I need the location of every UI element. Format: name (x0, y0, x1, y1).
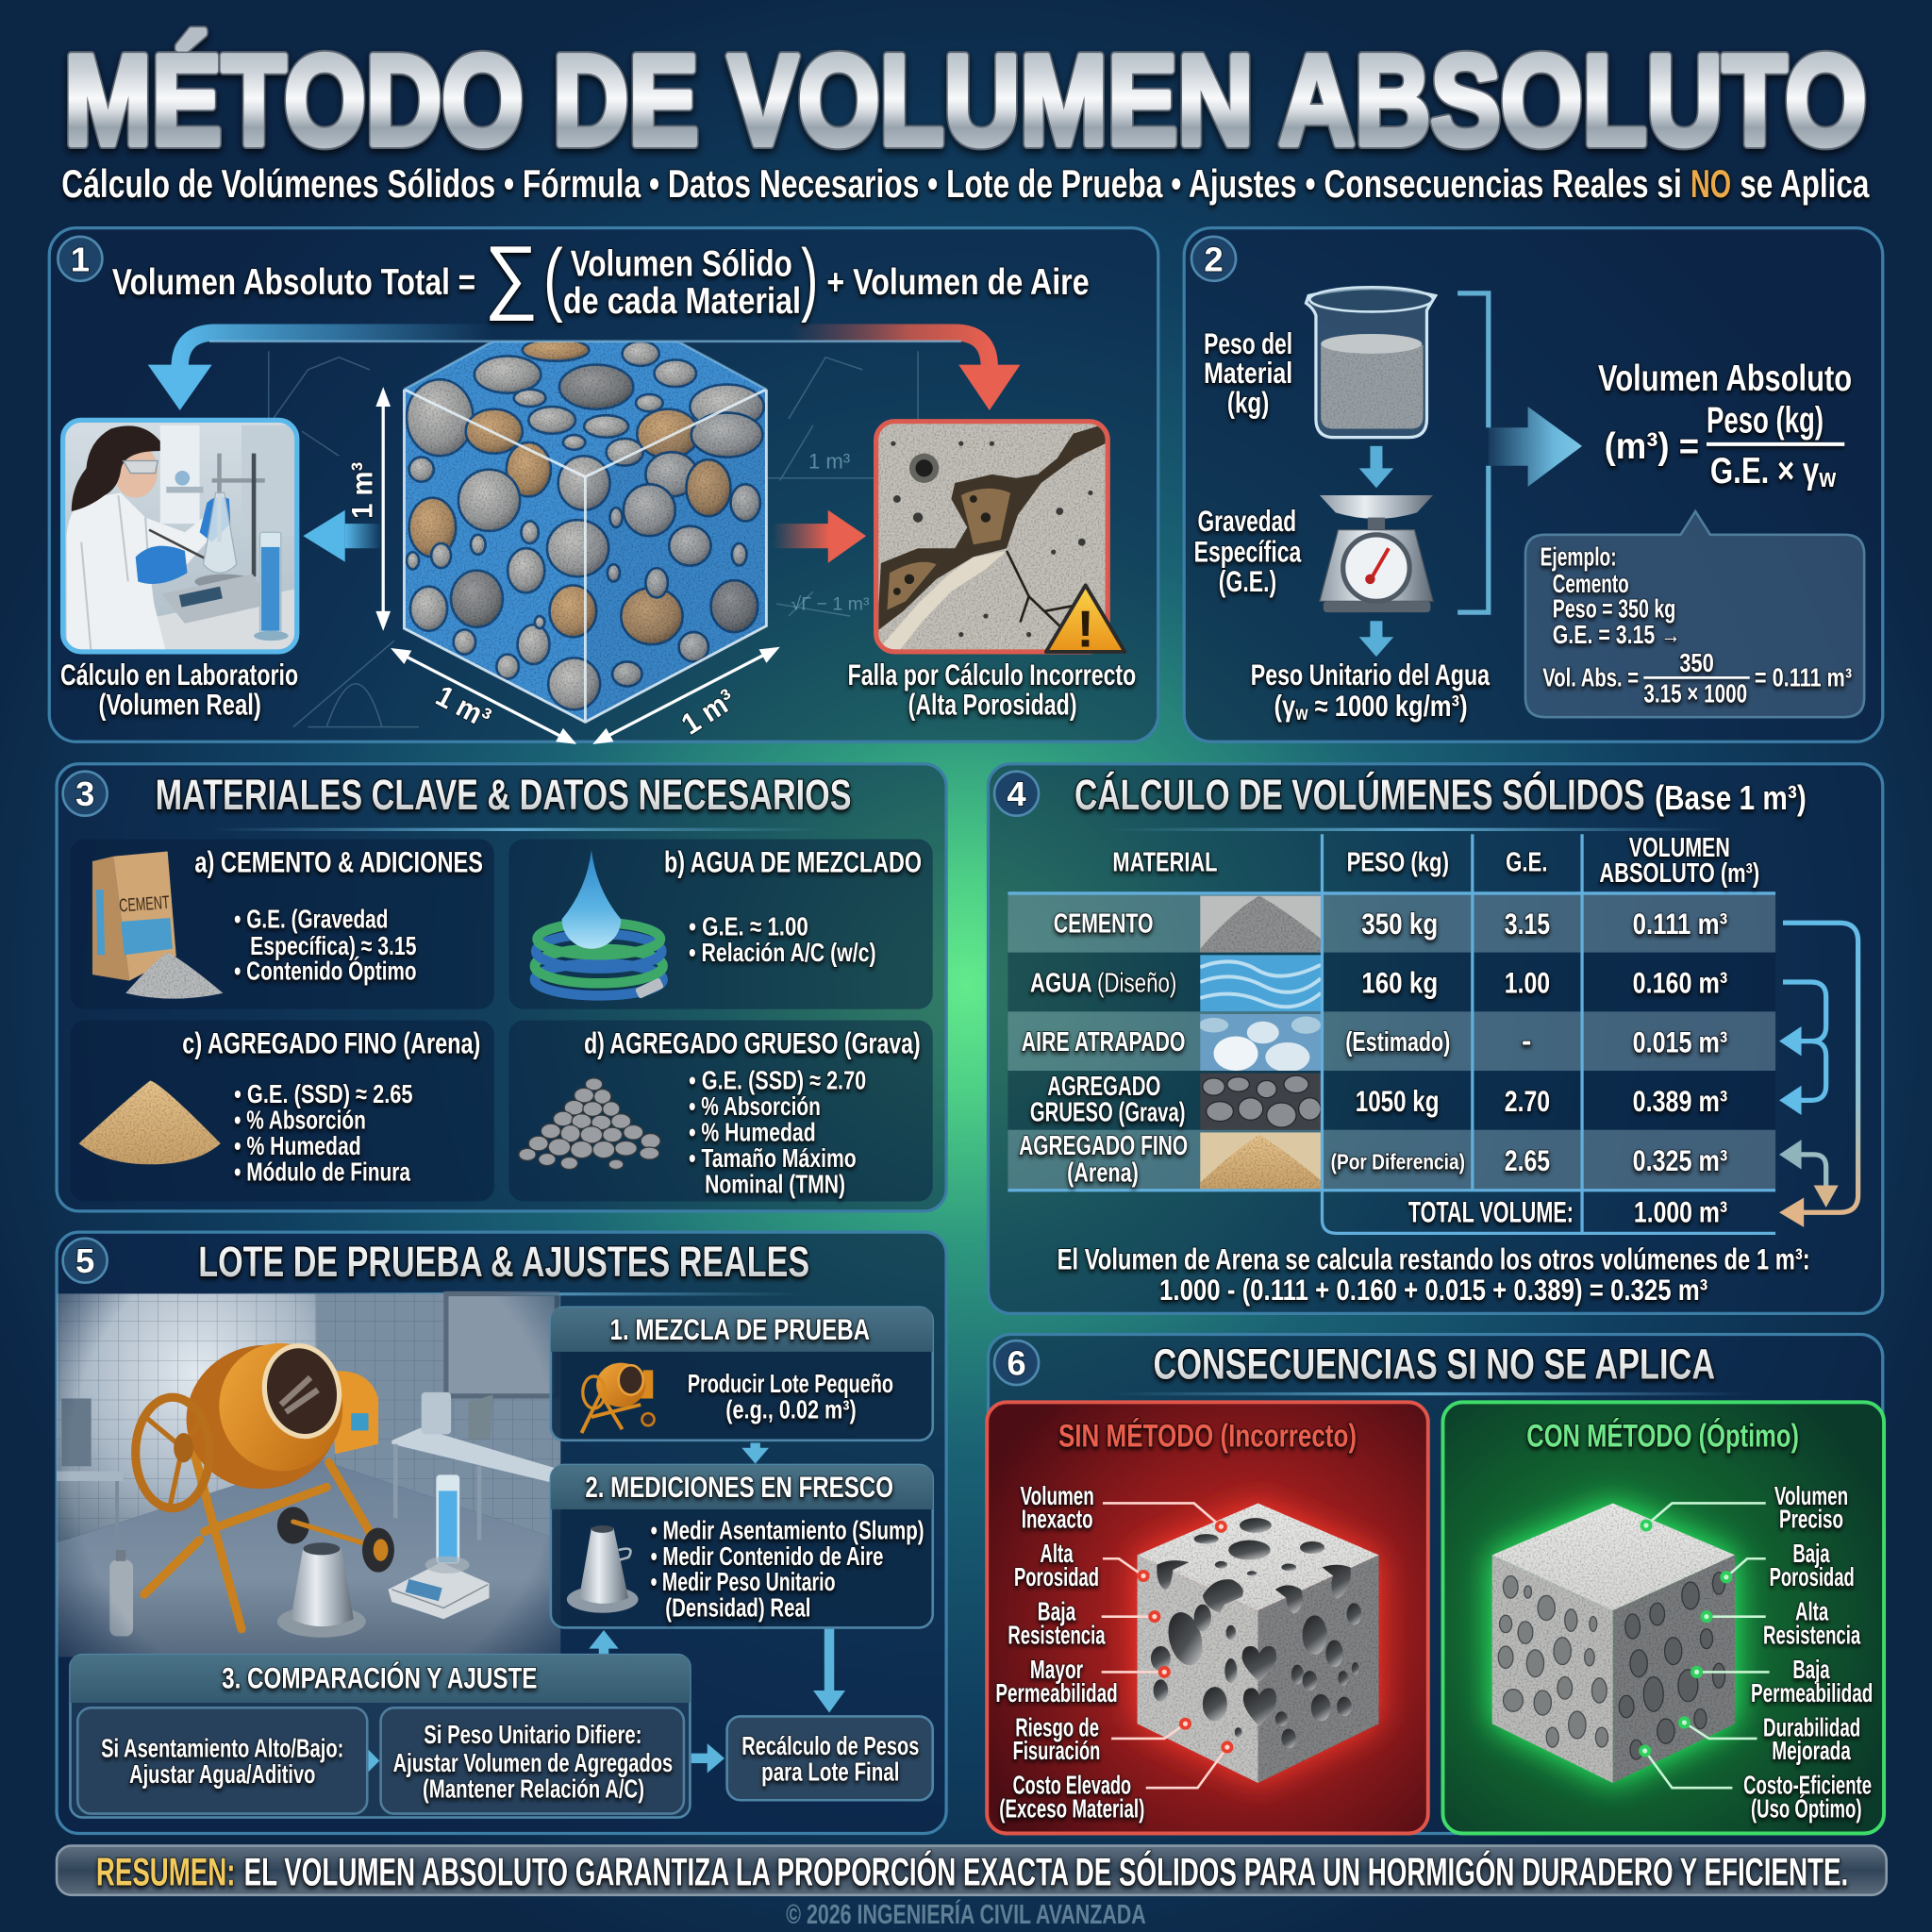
table text: GRUESO (Grava) (1030, 1098, 1185, 1128)
panel 1: formula and cube (49, 228, 1158, 744)
callout lines (1102, 1503, 1231, 1788)
table text: 3.15 (1505, 908, 1550, 941)
arrow: adjust back to measure (589, 1630, 619, 1663)
step 2 text: • Medir Asentamiento (Slump) (651, 1515, 924, 1544)
recalculation box (727, 1716, 933, 1800)
example box: G.E. = 3.15 → (1553, 620, 1681, 649)
step 2 text (585, 1471, 924, 1623)
step 1 text: (e.g., 0.02 m³) (725, 1394, 857, 1424)
card b text: • Relación A/C (w/c) (689, 938, 876, 967)
heading: with method: CON MÉTODO (Óptimo) (1526, 1418, 1799, 1454)
thumbnail: air (1199, 1014, 1321, 1072)
panel 3 heading: MATERIALES CLAVE & DATOS NECESARIOS (156, 771, 852, 819)
summary bar: RESUMEN: (96, 1849, 235, 1893)
card c text: • % Absorción (234, 1105, 366, 1134)
icon: water drop and hose (535, 850, 664, 999)
dimension: left base: 1 m³ (430, 679, 496, 735)
panel 2 number: 2 (1204, 240, 1224, 278)
icon: cement bag (92, 852, 223, 999)
icon: mini mixer (581, 1363, 655, 1433)
mixer frame and wheels (277, 1507, 309, 1544)
panel 5 heading: LOTE DE PRUEBA & AJUSTES REALES (198, 1238, 809, 1286)
table text: - (1522, 1024, 1532, 1058)
callout labels: Baja (1792, 1655, 1830, 1684)
arrow: scale to water unit weight (1359, 621, 1393, 657)
callout labels: (Uso Óptimo) (1751, 1794, 1862, 1824)
table text: TOTAL VOLUME: (1408, 1196, 1574, 1229)
callout labels: Riesgo de (1015, 1712, 1099, 1741)
label: lab (60, 658, 298, 722)
callout lines (1641, 1503, 1770, 1788)
table text: 1050 kg (1356, 1085, 1440, 1118)
panel 3 number: 3 (75, 774, 94, 813)
example box: Peso = 350 kg (1553, 593, 1675, 623)
side lab table (391, 1428, 566, 1486)
table text: 2.70 (1505, 1085, 1550, 1118)
panel 1 number: 1 (71, 240, 90, 278)
step 3 text: 3. COMPARACIÓN Y AJUSTE (222, 1660, 537, 1694)
labels: inputs: Peso Unitario del Agua (1251, 658, 1491, 691)
formula result (1598, 358, 1852, 493)
panel 3: key materials (57, 764, 946, 1211)
callout labels: Resistencia (1763, 1620, 1861, 1649)
callout labels: (Exceso Material) (999, 1794, 1144, 1824)
formula: + Volumen de Aire (826, 262, 1090, 303)
card: without method (987, 1402, 1428, 1834)
icon: scale (1320, 495, 1433, 612)
recalculation box: para Lote Final (761, 1757, 899, 1786)
callout labels: Mejorada (1772, 1736, 1851, 1765)
panel 4 number: 4 (1007, 774, 1026, 813)
table text: 1.000 m³ (1634, 1196, 1727, 1229)
callout labels: Baja (1792, 1539, 1830, 1568)
card a text: a) CEMENTO & ADICIONES (194, 846, 483, 879)
formula result: (m³) = (1605, 426, 1699, 467)
formula: Volumen Sólido (571, 244, 792, 285)
icon: beaker (1306, 287, 1436, 438)
panel 1 number (58, 237, 102, 281)
callout labels: Preciso (1779, 1505, 1843, 1534)
image: scientist in laboratory (63, 420, 297, 653)
table text: 0.015 m³ (1633, 1025, 1727, 1058)
labels: inputs (1194, 327, 1491, 724)
card c text: c) AGREGADO FINO (Arena) (182, 1027, 480, 1060)
label: lab: (Volumen Real) (98, 689, 261, 722)
note: sand by difference: 1.000 - (0.111 + 0.160 + 0.015 + 0.389) = 0.325 m³ (1159, 1274, 1707, 1307)
arrow: right to failure (773, 510, 866, 563)
panel 6 number (994, 1341, 1039, 1385)
dense cube (1492, 1503, 1735, 1783)
labels: inputs: Material (1204, 357, 1292, 390)
step 3 text: Si Asentamiento Alto/Bajo: (101, 1734, 343, 1763)
panel 4 number (994, 772, 1039, 816)
panel 5 number: 5 (75, 1241, 94, 1280)
arrow: beaker to scale (1359, 446, 1393, 488)
step 3 text: Ajustar Agua/Aditivo (129, 1759, 315, 1789)
callout labels: Durabilidad (1763, 1712, 1860, 1741)
panel 3 number (63, 772, 108, 816)
formula: ) (801, 233, 818, 324)
card d text (584, 1027, 921, 1198)
formula: de cada Material (563, 281, 801, 322)
table text: (Estimado) (1345, 1027, 1450, 1058)
labels: inputs: (kg) (1227, 387, 1269, 420)
table row fills (1008, 894, 1775, 1189)
callout labels: Mayor (1030, 1655, 1083, 1684)
panel 5 number (63, 1239, 108, 1283)
step 1 box (551, 1307, 933, 1441)
table text: VOLUMEN (1629, 833, 1730, 863)
arrow: top curve to failure (789, 333, 1020, 410)
table text: MATERIAL (1112, 847, 1217, 877)
card c text: • % Humedad (234, 1131, 361, 1160)
card d text: d) AGREGADO GRUESO (Grava) (584, 1027, 921, 1060)
formula result: Peso (kg) (1707, 400, 1824, 441)
callout labels: Costo Elevado (1013, 1771, 1131, 1800)
callout labels: Fisuración (1013, 1736, 1100, 1765)
label: failure: (Alta Porosidad) (908, 689, 1077, 722)
card c text: • Módulo de Finura (234, 1157, 411, 1186)
panel 5: trial batch (57, 1232, 946, 1834)
panel 4: solid volumes table (989, 764, 1883, 1313)
panel 4 heading: CÁLCULO DE VOLÚMENES SÓLIDOS (1074, 770, 1645, 819)
mixer hand wheel (136, 1397, 209, 1508)
step 1 text: Producir Lote Pequeño (688, 1369, 893, 1398)
formula: ( (543, 233, 563, 324)
callout labels: Volumen (1020, 1481, 1094, 1510)
label: failure: Falla por Cálculo Incorrecto (848, 658, 1136, 691)
scene: concrete mixer lab (57, 1293, 566, 1657)
icon: sand pile (79, 1080, 221, 1164)
card b: water (508, 839, 933, 1009)
example box: 350 (1679, 648, 1714, 677)
formula: ∑ (484, 228, 539, 321)
step 2 text: (Densidad) Real (665, 1593, 810, 1623)
formula result: w (1819, 463, 1837, 493)
table text: 0.111 m³ (1633, 908, 1727, 941)
dimension: right base: 1 m³ (675, 683, 741, 741)
table text: CEMENTO (1054, 909, 1154, 940)
thumbnail: cement (1200, 896, 1321, 953)
dimension: left base (391, 648, 576, 744)
panel 6 heading: CONSECUENCIAS SI NO SE APLICA (1154, 1341, 1715, 1389)
panel 2 number (1191, 237, 1236, 281)
callout labels (995, 1481, 1144, 1824)
subtitle: se Aplica (1740, 161, 1870, 206)
image: cracked concrete (876, 422, 1108, 652)
icon: warning triangle (1046, 585, 1124, 658)
table (1008, 833, 1775, 1233)
card a text (194, 846, 483, 985)
card c: sand (70, 1020, 494, 1201)
step 1 text (610, 1313, 893, 1424)
card b text (664, 846, 922, 967)
step 2 text: • Medir Peso Unitario (651, 1567, 836, 1596)
example box (1525, 511, 1864, 717)
label: lab: Cálculo en Laboratorio (60, 658, 298, 691)
table text: 350 kg (1361, 908, 1438, 941)
table text: AGREGADO FINO (1019, 1131, 1188, 1161)
example box: 3.15 × 1000 (1643, 678, 1747, 708)
step 2 text: 2. MEDICIONES EN FRESCO (585, 1471, 893, 1504)
porous cube (1138, 1503, 1379, 1783)
arrow: top curve to lab (148, 333, 492, 410)
arrow: left to lab (303, 510, 382, 562)
label: failure (848, 658, 1136, 722)
table text: AGREGADO (1047, 1072, 1160, 1102)
formula result: G.E. × γ (1710, 451, 1847, 491)
labels: inputs: (G.E.) (1219, 565, 1276, 598)
card b text: • G.E. ≈ 1.00 (689, 911, 808, 941)
big arrow (1489, 407, 1582, 487)
flow arrows: volume sum (1779, 923, 1858, 1227)
table grid (1008, 834, 1775, 1233)
thumbnail: gravel (1200, 1074, 1321, 1130)
thumbnail: sand (1200, 1132, 1321, 1189)
callout labels: Alta (1795, 1597, 1829, 1626)
labels: inputs: Gravedad (1198, 505, 1296, 538)
arrow: step 1 to 2 (741, 1442, 769, 1464)
footer: © 2026 INGENIERÍA CIVIL AVANZADA (786, 1898, 1146, 1930)
card: with method (1442, 1402, 1884, 1834)
card a text: • Contenido Óptimo (234, 956, 416, 985)
table text: PESO (kg) (1347, 847, 1449, 877)
callout labels: Alta (1040, 1539, 1074, 1568)
card a text: Específica) ≈ 3.15 (250, 931, 416, 960)
step 3 box (70, 1655, 690, 1818)
arrow: adjust to recalculation (691, 1743, 724, 1774)
card d text: • % Humedad (689, 1117, 816, 1146)
table text: 0.160 m³ (1633, 967, 1727, 1000)
callout labels: Permeabilidad (1751, 1678, 1873, 1707)
icon: slump cone (567, 1525, 639, 1613)
subtitle: NO (1690, 161, 1731, 206)
labels: inputs: w (1294, 703, 1308, 724)
table text: (Por Diferencia) (1331, 1150, 1465, 1174)
step 3 text: Ajustar Volumen de Agregados (393, 1748, 673, 1777)
example box: Vol. Abs. = (1542, 663, 1639, 692)
panel 2: absolute volume formula (1184, 228, 1883, 741)
callout labels: Porosidad (1770, 1562, 1855, 1591)
bracket (1457, 293, 1489, 612)
callout labels: Baja (1038, 1597, 1076, 1626)
table text: AGUA (Diseño) (1030, 968, 1176, 998)
formula (112, 228, 1090, 324)
panel 6 number: 6 (1007, 1344, 1026, 1383)
icon: cement bag: CEMENT (119, 892, 170, 917)
table text: 2.65 (1505, 1144, 1550, 1177)
card d text: • Tamaño Máximo (689, 1143, 857, 1173)
callout labels: Permeabilidad (995, 1678, 1118, 1707)
card d text: • % Absorción (689, 1091, 821, 1121)
table text: G.E. (1506, 847, 1547, 877)
step 2 text: • Medir Contenido de Aire (651, 1541, 883, 1571)
table text: 0.325 m³ (1633, 1144, 1727, 1177)
recalculation box: Recálculo de Pesos (741, 1731, 919, 1760)
table text: 0.389 m³ (1633, 1085, 1727, 1118)
cube with aggregates (209, 333, 961, 727)
labels: inputs: (γ (1274, 690, 1300, 723)
callout labels: Porosidad (1014, 1562, 1099, 1591)
heading: without method: SIN MÉTODO (Incorrecto) (1058, 1418, 1357, 1454)
labels: inputs: Específica (1194, 536, 1302, 569)
callout labels: Inexacto (1022, 1505, 1093, 1534)
step 3 text (101, 1660, 673, 1804)
table text: 1.00 (1505, 967, 1550, 1000)
callout labels: Costo-Eficiente (1743, 1771, 1872, 1800)
arrow: measure to recalculation (813, 1629, 845, 1713)
card d: gravel (508, 1020, 933, 1201)
callout labels: Volumen (1774, 1481, 1848, 1510)
labels: inputs: Peso del (1204, 327, 1292, 360)
card a text: • G.E. (Gravedad (234, 905, 388, 934)
example box: = 0.111 m³ (1755, 663, 1852, 692)
scale and cylinder (388, 1562, 490, 1619)
formula: Volumen Absoluto Total = (112, 262, 475, 303)
callout labels (1743, 1481, 1873, 1824)
faint engineering sketches (269, 351, 918, 727)
step 3 text: Si Peso Unitario Difiere: (424, 1720, 641, 1749)
dimension: right base (592, 647, 780, 744)
step 3 text: (Mantener Relación A/C) (423, 1774, 644, 1804)
card c text (182, 1027, 480, 1186)
callout labels: Resistencia (1008, 1620, 1106, 1649)
panel 6: consequences (987, 1335, 1884, 1834)
card d text: Nominal (TMN) (705, 1169, 845, 1198)
dimension: height: 1 m³ (345, 462, 378, 519)
card d text: • G.E. (SSD) ≈ 2.70 (689, 1066, 866, 1095)
formula result: Volumen Absoluto (1598, 358, 1852, 399)
dimension: height (345, 387, 391, 631)
card c text: • G.E. (SSD) ≈ 2.65 (234, 1079, 413, 1108)
thumbnail: water (1200, 955, 1321, 1011)
card b text: b) AGUA DE MEZCLADO (664, 846, 922, 879)
table text: 160 kg (1361, 967, 1438, 1000)
card a: cement (70, 839, 494, 1009)
icon: gravel pile (519, 1078, 660, 1170)
example box: Ejemplo: (1541, 542, 1617, 572)
note: sand by difference (1058, 1242, 1810, 1307)
step 2 box (551, 1465, 933, 1627)
mixer drum (170, 1328, 355, 1506)
faint engineering sketches: 1 m³ (808, 449, 850, 473)
slump cone (277, 1606, 366, 1638)
table text (1019, 833, 1759, 1229)
icon: warning triangle: ! (1077, 600, 1094, 658)
labels: inputs: ≈ 1000 kg/m³) (1308, 690, 1468, 723)
panel 4 heading: (Base 1 m³) (1655, 778, 1807, 817)
table text: AIRE ATRAPADO (1022, 1027, 1185, 1058)
faint engineering sketches: √Γ − 1 m³ (791, 594, 870, 615)
example box: Cemento (1553, 569, 1629, 598)
step 1 text: 1. MEZCLA DE PRUEBA (610, 1313, 870, 1346)
mixer motor housing (330, 1371, 378, 1454)
table text: (Arena) (1067, 1158, 1139, 1189)
table text: ABSOLUTO (m³) (1599, 858, 1759, 889)
